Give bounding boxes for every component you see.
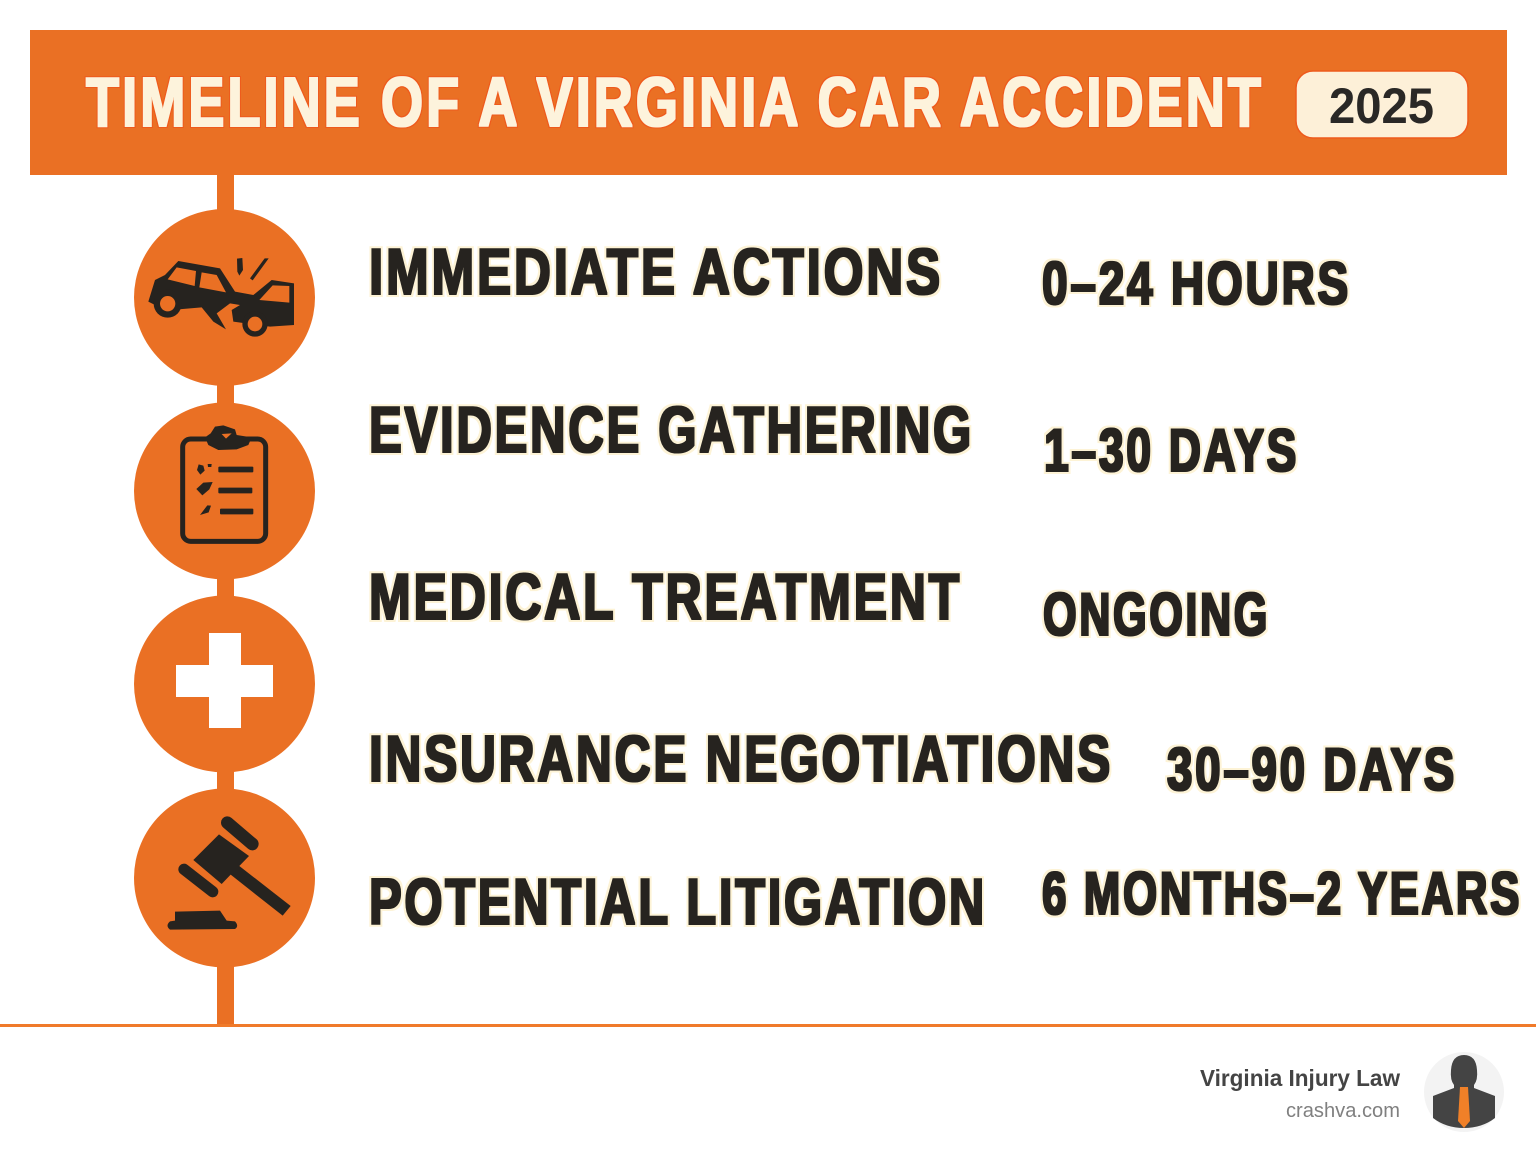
row 3: medical treatment: MEDICAL TREATMENT [369,560,962,633]
icon: lawyer avatar [1424,1052,1504,1132]
year badge [1296,71,1468,138]
row 1: immediate actions [369,235,1351,317]
year badge: 2025 [1329,78,1434,134]
row 4: insurance negotiations: INSURANCE NEGOTIATIONS [369,722,1113,795]
brand name: Virginia Injury Law [1200,1065,1400,1091]
timeline vertical line [217,175,234,1025]
row 5: potential litigation: POTENTIAL LITIGATION [369,865,987,938]
icon circle: medical cross [134,596,315,772]
timeline rows [369,235,1522,938]
footer divider [0,1024,1536,1027]
row 3: medical treatment: ONGOING [1043,581,1270,648]
row 1: immediate actions: 0–24 HOURS [1042,250,1351,317]
icon circle: gavel [134,788,315,968]
row 4: insurance negotiations: 30–90 DAYS [1167,736,1457,803]
row 2: evidence gathering: 1–30 DAYS [1044,417,1299,484]
icon circle: car crash [134,209,315,386]
footer brand [1200,1052,1504,1132]
row 5: potential litigation [369,860,1522,938]
header banner [30,30,1507,175]
row 2: evidence gathering [369,393,1299,484]
row 1: immediate actions: IMMEDIATE ACTIONS [369,235,943,308]
row 2: evidence gathering: EVIDENCE GATHERING [369,393,974,466]
brand url: crashva.com [1286,1100,1400,1122]
icon circle: clipboard checklist [134,402,315,580]
